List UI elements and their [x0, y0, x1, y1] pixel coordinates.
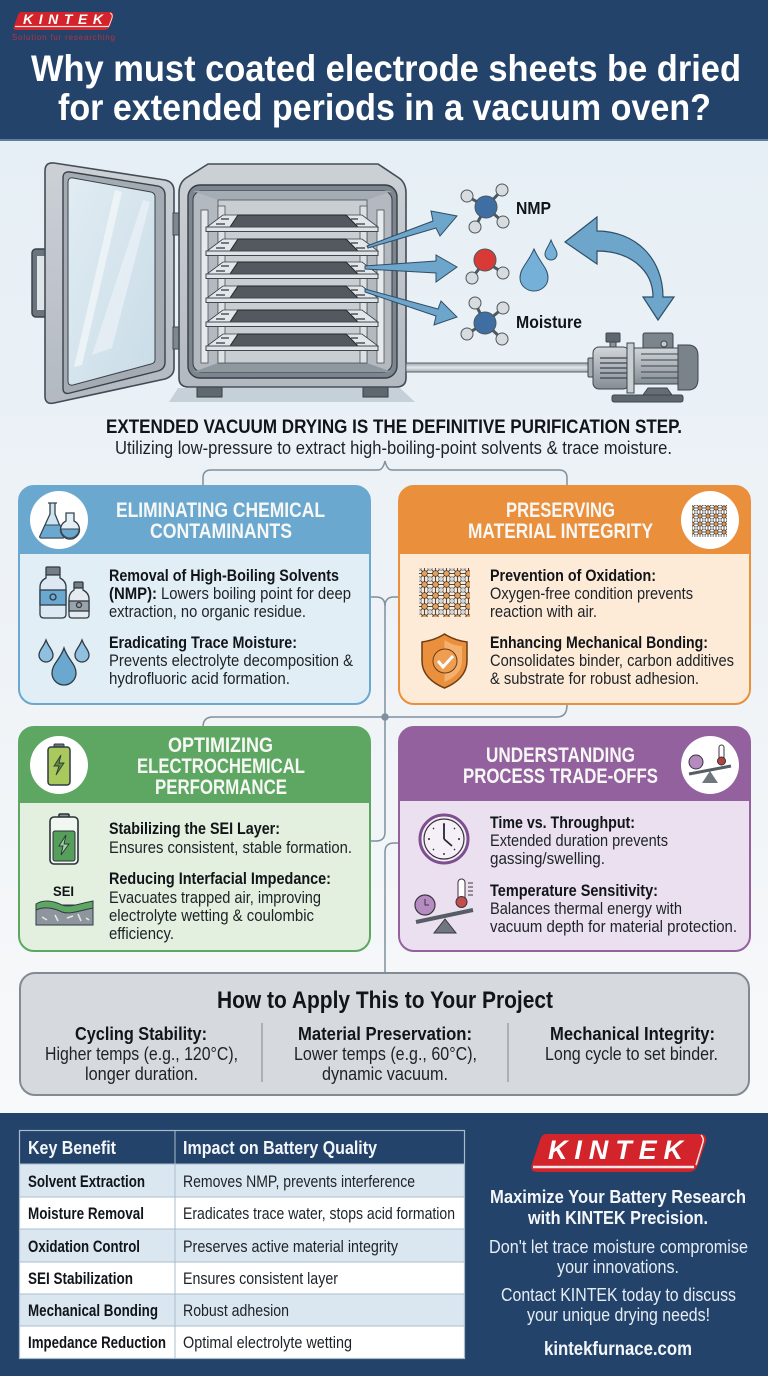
table row: solvent extraction: Solvent Extraction: [28, 1173, 145, 1191]
text: oxidation: reaction with air.: [490, 602, 597, 621]
connector lines: [203, 461, 567, 973]
oven door: [32, 163, 179, 403]
call to action heading: Maximize Your Battery Research: [490, 1186, 746, 1207]
text: impedance: Evacuates trapped air, improving: [109, 888, 321, 907]
panel title: UNDERSTANDING: [486, 744, 635, 767]
panel: eliminating chemical contaminants: [19, 486, 370, 704]
illustration: vacuum oven: [32, 163, 698, 403]
panel title: [468, 499, 653, 543]
call to action text: Contact KINTEK today to discuss: [501, 1285, 736, 1305]
text: high-boiling solvents: extraction, no organic residue.: [109, 602, 306, 621]
column: mechanical integrity: Mechanical Integrity:: [550, 1023, 715, 1044]
panel title: PERFORMANCE: [155, 776, 287, 799]
icon: SEI layer: SEI: [53, 884, 74, 899]
text: bonding: & substrate for robust adhesion.: [490, 669, 699, 688]
column: mechanical integrity: [545, 1023, 718, 1064]
label: Moisture: Moisture: [516, 312, 582, 332]
panel: optimizing electrochemical performance: [19, 727, 370, 951]
table row: SEI stabilization: [28, 1270, 338, 1288]
column: material preservation: Material Preservation:: [298, 1023, 472, 1044]
panel title: PROCESS TRADE-OFFS: [463, 765, 658, 788]
oven body: [179, 164, 406, 397]
text: trace moisture: Eradicating Trace Moisture:: [109, 633, 297, 652]
subheading: Utilizing low-pressure to extract high-boiling-point solvents & trace moisture.: [115, 438, 672, 458]
table row: oxidation control: [28, 1238, 399, 1256]
text: oxidation: [490, 566, 693, 621]
logo: KINTEK large: KINTEK: [548, 1135, 686, 1165]
text: bonding: [490, 633, 734, 688]
arrow: moisture vapor: [365, 289, 457, 325]
text: time vs throughput: gassing/swelling.: [490, 849, 605, 868]
molecule: NMP: [461, 184, 509, 233]
table row: moisture removal: Eradicates trace water, stops acid formation: [183, 1205, 455, 1223]
table row: moisture removal: Moisture Removal: [28, 1205, 144, 1223]
page background: [0, 140, 768, 1113]
logo: KINTEK small: [12, 11, 115, 42]
panel: how to apply: [20, 973, 749, 1095]
table row: mechanical bonding: [28, 1302, 289, 1320]
text: impedance: electrolyte wetting & coulombic: [109, 906, 314, 925]
text: high-boiling solvents: [109, 566, 351, 621]
panel title: ELIMINATING CHEMICAL: [116, 499, 325, 522]
column: cycling stability: [45, 1023, 238, 1084]
text: time vs throughput: Extended duration prevents: [490, 831, 668, 850]
column: mechanical integrity: Long cycle to set binder.: [545, 1043, 718, 1064]
panel: understanding process trade-offs: [399, 727, 750, 951]
column: cycling stability: Cycling Stability:: [75, 1023, 207, 1044]
icon: lattice circle: [681, 491, 739, 549]
text: high-boiling solvents: (NMP):: [109, 584, 157, 603]
title: [31, 47, 741, 128]
table row: impedance reduction: [28, 1334, 352, 1352]
icon: time and temperature balance: [415, 879, 473, 933]
logo: KINTEK small: Solution fur researching: [12, 33, 115, 42]
text: SEI layer: [109, 819, 352, 857]
column: material preservation: dynamic vacuum.: [322, 1063, 448, 1084]
text: high-boiling solvents: Lowers boiling point for deep: [161, 584, 351, 603]
table row: impedance reduction: Impedance Reduction: [28, 1334, 166, 1352]
text: temperature sensitivity: [490, 881, 737, 936]
panel title: ELECTROCHEMICAL: [137, 755, 305, 778]
column: material preservation: Lower temps (e.g., 60°C),: [294, 1043, 477, 1064]
heading: EXTENDED VACUUM DRYING IS THE DEFINITIVE PURIFICATION STEP.: [106, 416, 682, 438]
table header: Key Benefit: [28, 1137, 116, 1158]
text: temperature sensitivity: Temperature Sensitivity:: [490, 881, 658, 900]
text: impedance: efficiency.: [109, 924, 174, 943]
website: kintekfurnace.com: [544, 1339, 692, 1360]
table row: mechanical bonding: Robust adhesion: [183, 1302, 289, 1320]
call to action text: your unique drying needs!: [527, 1305, 710, 1325]
panel title: [116, 499, 325, 543]
header band: [0, 0, 768, 141]
call to action heading: with KINTEK Precision.: [527, 1207, 708, 1228]
key message: [106, 416, 682, 458]
text: bonding: Consolidates binder, carbon additives: [490, 651, 734, 670]
text: impedance: [109, 869, 331, 943]
table: benefits: [19, 1130, 464, 1358]
icon: bottles: [40, 567, 89, 618]
logo: KINTEK small: KINTEK: [23, 11, 104, 27]
icon: battery circle: [30, 736, 88, 794]
panel title: OPTIMIZING: [168, 734, 273, 757]
table row: mechanical bonding: Mechanical Bonding: [28, 1302, 158, 1320]
icon: large droplet: [520, 249, 548, 291]
logo: KINTEK large: [531, 1134, 706, 1172]
table row: SEI stabilization: SEI Stabilization: [28, 1270, 133, 1288]
column: cycling stability: longer duration.: [85, 1063, 198, 1084]
column: material preservation: [294, 1023, 477, 1084]
icon: clock: [420, 815, 468, 863]
text: time vs throughput: Time vs. Throughput:: [490, 813, 635, 832]
vacuum pipe: [406, 363, 590, 372]
icon: small droplet: [545, 240, 557, 260]
text: temperature sensitivity: vacuum depth for material protection.: [490, 917, 737, 936]
electrode sheets on shelves: [206, 215, 378, 350]
arrow: NMP vapor: [367, 211, 457, 248]
text: SEI layer: Ensures consistent, stable formation.: [109, 838, 352, 857]
table row: oxidation control: Oxidation Control: [28, 1238, 140, 1256]
table header: Impact on Battery Quality: [183, 1137, 378, 1158]
icon: balance circle: [681, 736, 739, 794]
label: NMP: NMP: [516, 198, 551, 218]
table row: oxidation control: Preserves active material integrity: [183, 1238, 399, 1256]
title: for extended periods in a vacuum oven?: [58, 86, 711, 128]
molecule: moisture: [461, 297, 509, 345]
text: time vs throughput: [490, 813, 668, 868]
icon: battery: [50, 814, 78, 864]
text: SEI layer: Stabilizing the SEI Layer:: [109, 819, 280, 838]
icon: SEI layer: [36, 884, 93, 925]
call to action text: your innovations.: [557, 1257, 679, 1277]
arrow: water vapor: [365, 255, 457, 282]
text: trace moisture: [109, 633, 354, 688]
table header: [28, 1137, 378, 1158]
text: high-boiling solvents: Removal of High-Boiling Solvents: [109, 566, 339, 585]
icon: atomic lattice: [419, 568, 470, 617]
panel title: [463, 744, 658, 788]
panel: preserving material integrity: [399, 486, 750, 704]
panel title: CONTAMINANTS: [150, 520, 292, 543]
text: oxidation: Prevention of Oxidation:: [490, 566, 656, 585]
call to action heading: [490, 1186, 746, 1228]
column: cycling stability: Higher temps (e.g., 120°C),: [45, 1043, 238, 1064]
vacuum pump: [588, 333, 698, 402]
table row: impedance reduction: Optimal electrolyte wetting: [183, 1334, 352, 1352]
text: impedance: Reducing Interfacial Impedance:: [109, 869, 331, 888]
table row: moisture removal: [28, 1205, 455, 1223]
panel title: PRESERVING: [506, 499, 615, 522]
text: trace moisture: Prevents electrolyte decomposition &: [109, 651, 354, 670]
icon: droplets: [39, 640, 89, 685]
oven shadow: [169, 388, 415, 402]
text: oxidation: Oxygen-free condition prevents: [490, 584, 693, 603]
text: bonding: Enhancing Mechanical Bonding:: [490, 633, 708, 652]
text: trace moisture: hydrofluoric acid formation.: [109, 669, 290, 688]
panel title: [137, 734, 305, 799]
text: temperature sensitivity: Balances thermal energy with: [490, 899, 682, 918]
panel heading: How to Apply This to Your Project: [217, 987, 553, 1014]
table row: solvent extraction: [28, 1173, 415, 1191]
arrow: vacuum circulation: [565, 217, 674, 320]
panel title: MATERIAL INTEGRITY: [468, 520, 653, 543]
icon: flasks: [30, 491, 88, 549]
call to action text: Don't let trace moisture compromise: [489, 1237, 748, 1257]
icon: shield: [422, 634, 467, 688]
table row: solvent extraction: Removes NMP, prevents interference: [183, 1173, 415, 1191]
table row: SEI stabilization: Ensures consistent layer: [183, 1270, 338, 1288]
footer band: [0, 1113, 768, 1376]
molecule: water: [466, 249, 509, 284]
call to action text: [489, 1237, 748, 1325]
